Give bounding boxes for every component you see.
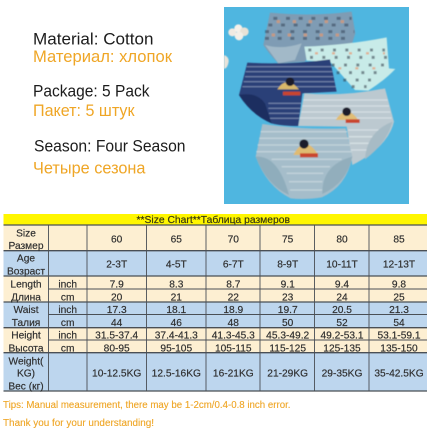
package russian: Пакет: 5 штук <box>33 101 135 120</box>
row: weight: 21-29KG <box>267 369 308 380</box>
row: height inch: 31.5-37.4 <box>95 331 139 342</box>
row: waist cm: cm <box>61 318 74 329</box>
row: waist cm: Талия <box>12 318 40 329</box>
row: length inch: 8.7 <box>226 280 241 291</box>
row: waist cm: 48 <box>228 318 239 329</box>
tips note: Tips: Manual measurement, there may be 1-2cm/0.4-0.8 inch error. <box>3 400 290 411</box>
row: height inch: 37.4-41.3 <box>155 331 198 342</box>
row: waist cm <box>12 318 405 329</box>
row: age: 4-5T <box>166 260 187 271</box>
row: weight: 10-12.5KG <box>92 369 141 380</box>
product photo: five briefs on blue background <box>224 7 409 204</box>
row: size: Size <box>16 228 36 240</box>
table row backgrounds <box>4 225 427 391</box>
row: weight: Weight( <box>9 357 44 368</box>
row: length inch: 7.9 <box>110 280 124 291</box>
size chart title bar: **Size Chart**Таблица размеров <box>136 214 290 226</box>
row: height cm: 115-125 <box>269 343 306 354</box>
row: age: 6-7T <box>223 260 244 271</box>
size chart table <box>4 225 427 392</box>
row: age: 12-13T <box>383 260 415 271</box>
row: height cm: cm <box>61 343 74 354</box>
material english: Material: Cotton <box>33 30 154 49</box>
row: size: 80 <box>336 235 348 246</box>
row: waist cm: 44 <box>111 318 123 329</box>
row: age: Возраст <box>7 266 45 277</box>
row: height cm: 95-105 <box>160 343 192 354</box>
row: waist inch: 19.7 <box>278 305 298 316</box>
row: height cm: 80-95 <box>104 343 130 354</box>
icon: cotton balls <box>224 24 249 69</box>
row: height cm: 105-115 <box>215 343 252 354</box>
row: size <box>8 228 405 252</box>
row: length cm: Длина <box>11 292 41 303</box>
row: waist cm: 46 <box>171 318 182 329</box>
mickey rainbow print <box>293 139 318 157</box>
row: size: 70 <box>228 235 239 246</box>
brief: grey patterned <box>263 12 355 63</box>
row: height inch <box>11 331 421 342</box>
row: waist inch: 18.9 <box>223 305 244 316</box>
row: length cm: 23 <box>282 292 294 303</box>
row: waist inch: 17.3 <box>107 305 127 316</box>
row: length inch: 9.8 <box>392 280 406 291</box>
row: length cm: cm <box>61 292 74 303</box>
row: length inch: Length <box>10 280 42 291</box>
row: waist inch: 18.1 <box>166 305 187 316</box>
size chart title bar <box>4 214 427 226</box>
row: weight: KG) <box>17 369 35 380</box>
row: size: 85 <box>393 235 405 246</box>
row: length inch: 9.4 <box>335 280 349 291</box>
row: height inch: 53.1-59.1 <box>377 331 421 342</box>
row: weight <box>8 357 424 392</box>
season russian: Четыре сезона <box>33 158 146 177</box>
row: size: Размер <box>8 241 44 252</box>
row: height inch: Height <box>11 331 41 342</box>
row: waist inch: 20.5 <box>332 305 352 316</box>
row: height cm <box>8 343 418 354</box>
row: weight: 12.5-16KG <box>152 369 201 380</box>
mickey rainbow print <box>336 107 360 123</box>
table text <box>7 228 424 392</box>
row: waist inch: Waist <box>13 305 39 316</box>
brief: blue grey striped front <box>256 124 352 199</box>
package english: Package: 5 Pack <box>33 82 150 101</box>
brief: mint patterned <box>304 37 395 91</box>
row: weight: 16-21KG <box>213 369 254 380</box>
row: age: 8-9T <box>277 260 298 271</box>
row: length cm: 22 <box>228 292 239 303</box>
row: waist inch <box>13 305 409 316</box>
row: height inch: 41.3-45.3 <box>212 331 255 342</box>
thank you note: Thank you for your understanding! <box>3 418 154 429</box>
row: weight: 35-42.5KG <box>374 369 424 380</box>
row: age <box>7 254 415 277</box>
brief: light grey striped <box>298 88 394 165</box>
season english: Season: Four Season <box>34 137 186 156</box>
row: height inch: 45.3-49.2 <box>266 331 310 342</box>
mickey rainbow print <box>277 77 300 95</box>
row: age: 10-11T <box>326 260 358 271</box>
row: length inch <box>10 280 406 291</box>
row: weight: Вес (кг) <box>8 381 44 392</box>
row: length inch: inch <box>58 280 77 291</box>
row: length cm: 25 <box>393 292 405 303</box>
row: weight: 29-35KG <box>322 369 362 380</box>
row: length cm: 20 <box>111 292 123 303</box>
brief: navy striped <box>239 59 337 126</box>
row: waist inch: inch <box>58 305 77 316</box>
row: size: 65 <box>171 235 182 246</box>
row: age: Age <box>17 254 35 265</box>
row: height cm: Высота <box>8 343 44 354</box>
row: height inch: 49.2-53.1 <box>320 331 364 342</box>
row: length cm: 24 <box>336 292 348 303</box>
row: waist inch: 21.3 <box>389 305 409 316</box>
row: waist cm: 50 <box>282 318 294 329</box>
row: length cm <box>11 292 405 303</box>
row: age: 2-3T <box>106 260 127 271</box>
row: height inch: inch <box>58 331 77 342</box>
material russian: Материал: хлопок <box>33 47 173 66</box>
row: size: 75 <box>282 235 294 246</box>
row: height cm: 135-150 <box>380 343 418 354</box>
row: length cm: 21 <box>171 292 182 303</box>
row: length inch: 9.1 <box>281 280 295 291</box>
row: size: 60 <box>111 235 123 246</box>
row: height cm: 125-135 <box>323 343 361 354</box>
row: waist cm: 52 <box>336 318 348 329</box>
row: waist cm: 54 <box>393 318 405 329</box>
row: length inch: 8.3 <box>169 280 184 291</box>
specifications text block <box>33 30 186 177</box>
